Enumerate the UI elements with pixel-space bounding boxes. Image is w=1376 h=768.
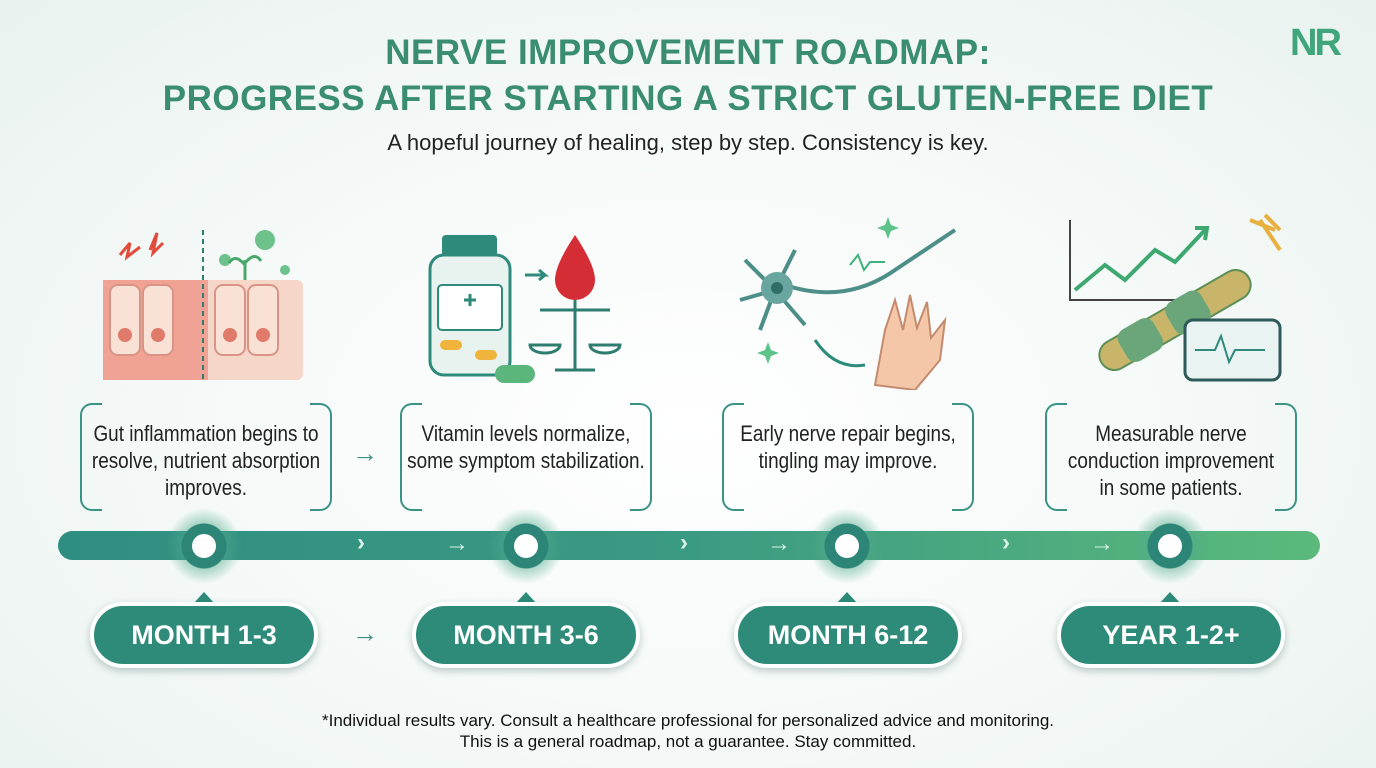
logo: NR xyxy=(1290,22,1339,64)
card: month 1-3: improves. xyxy=(165,475,247,500)
footer disclaimer: This is a general roadmap, not a guarantee. Stay committed. xyxy=(460,732,916,751)
pill: month 3-6: MONTH 3-6 xyxy=(453,620,599,650)
pill: year 1-2+ xyxy=(1057,602,1285,668)
timeline arrows: → xyxy=(767,530,791,557)
title xyxy=(163,33,1213,118)
pill: month 1-3: MONTH 1-3 xyxy=(131,620,277,650)
timeline arrows: → xyxy=(1090,530,1114,557)
card: month 3-6: Vitamin levels normalize, xyxy=(422,421,630,446)
footer disclaimer xyxy=(322,711,1054,751)
arrow: → xyxy=(352,438,378,468)
timeline bar xyxy=(58,531,1320,560)
timeline arrows xyxy=(357,529,1114,557)
subtitle: A hopeful journey of healing, step by step. Consistency is key. xyxy=(387,130,989,155)
arrow between pills: → xyxy=(352,618,378,648)
timeline arrows: › xyxy=(1002,529,1010,556)
icon: gut lining xyxy=(103,230,303,380)
title: PROGRESS AFTER STARTING A STRICT GLUTEN-FREE DIET xyxy=(163,79,1213,118)
card: month 1-3: Gut inflammation begins to xyxy=(93,421,319,446)
card: month 6-12: tingling may improve. xyxy=(759,448,937,473)
timeline arrows: → xyxy=(445,530,469,557)
timeline arrows: › xyxy=(680,529,688,556)
card: month 6-12 xyxy=(722,403,974,511)
timeline arrows: › xyxy=(357,529,365,556)
title: NERVE IMPROVEMENT ROADMAP: xyxy=(385,33,991,72)
pill: month 3-6 xyxy=(412,602,640,668)
card: year 1-2+: Measurable nerve xyxy=(1095,421,1247,446)
card: year 1-2+: in some patients. xyxy=(1099,475,1243,500)
card: year 1-2+ xyxy=(1045,403,1297,511)
card: year 1-2+: conduction improvement xyxy=(1068,448,1274,473)
node 1 xyxy=(166,508,242,584)
pill: year 1-2+: YEAR 1-2+ xyxy=(1102,620,1240,650)
icon: vitamins and balance xyxy=(428,235,622,383)
node 3 xyxy=(809,508,885,584)
pill: month 1-3 xyxy=(90,602,318,668)
icon: graph and nerve xyxy=(1069,214,1282,382)
card: month 1-3: resolve, nutrient absorption xyxy=(92,448,320,473)
icon: neuron and hand xyxy=(740,217,956,390)
node 2 xyxy=(488,508,564,584)
card: month 6-12: Early nerve repair begins, xyxy=(740,421,956,446)
card: month 3-6: some symptom stabilization. xyxy=(407,448,645,473)
node 4 xyxy=(1132,508,1208,584)
pill: month 6-12: MONTH 6-12 xyxy=(768,620,928,650)
pill: month 6-12 xyxy=(734,602,962,668)
card: month 1-3 xyxy=(80,403,332,511)
card: month 3-6 xyxy=(400,403,652,511)
pointer triangles xyxy=(194,592,1272,668)
footer disclaimer: *Individual results vary. Consult a healthcare professional for personalized advice and monitoring. xyxy=(322,711,1054,730)
